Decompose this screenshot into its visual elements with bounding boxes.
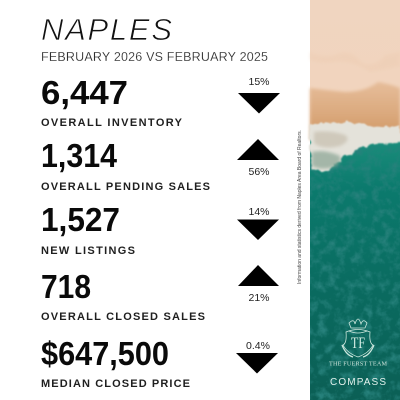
logo: crest: TF: [351, 335, 365, 352]
stat: new listings: [41, 202, 135, 257]
change: inventory down 15%: 15%: [248, 76, 270, 88]
stat: overall closed sales: OVERALL CLOSED SALES: [41, 311, 205, 323]
change: closed sales up 21%: [238, 265, 279, 304]
stat: overall closed sales: 718: [41, 269, 91, 306]
stat: overall inventory: OVERALL INVENTORY: [41, 117, 183, 129]
change: inventory down 15%: [238, 76, 280, 114]
stat: overall closed sales: [41, 269, 205, 323]
logo: team name: THE FUERST TEAM: [329, 360, 387, 368]
logo: compass: COMPASS: [330, 377, 386, 388]
change: pending sales up 56%: [237, 139, 279, 178]
change: closed sales up 21%: 21%: [248, 292, 270, 304]
stat: overall pending sales: [41, 138, 210, 193]
change: median price down 0.4%: 0.4%: [246, 340, 270, 352]
change: new listings down 14%: [237, 206, 279, 240]
title: NAPLES: [41, 12, 172, 47]
logo: crest: [342, 319, 374, 357]
change: new listings down 14%: 14%: [248, 206, 270, 218]
stat: overall inventory: [41, 75, 183, 129]
stat: overall inventory: 6,447: [41, 75, 128, 112]
stat: overall pending sales: OVERALL PENDING SALES: [41, 181, 210, 193]
stat: median closed price: [41, 336, 190, 390]
stat: new listings: 1,527: [41, 202, 120, 239]
stat: new listings: NEW LISTINGS: [41, 245, 135, 257]
photo: aerial beach: [310, 0, 400, 400]
stat: overall pending sales: 1,314: [41, 138, 117, 175]
change: pending sales up 56%: 56%: [248, 166, 270, 178]
change: median price down 0.4%: [236, 340, 278, 374]
subtitle: FEBRUARY 2026 VS FEBRUARY 2025: [41, 50, 268, 64]
stat: median closed price: MEDIAN CLOSED PRICE: [41, 378, 190, 390]
stat: median closed price: $647,500: [41, 336, 169, 373]
source note: Information and statistics derived from Naples Area Board of Realtors.: [297, 130, 303, 284]
